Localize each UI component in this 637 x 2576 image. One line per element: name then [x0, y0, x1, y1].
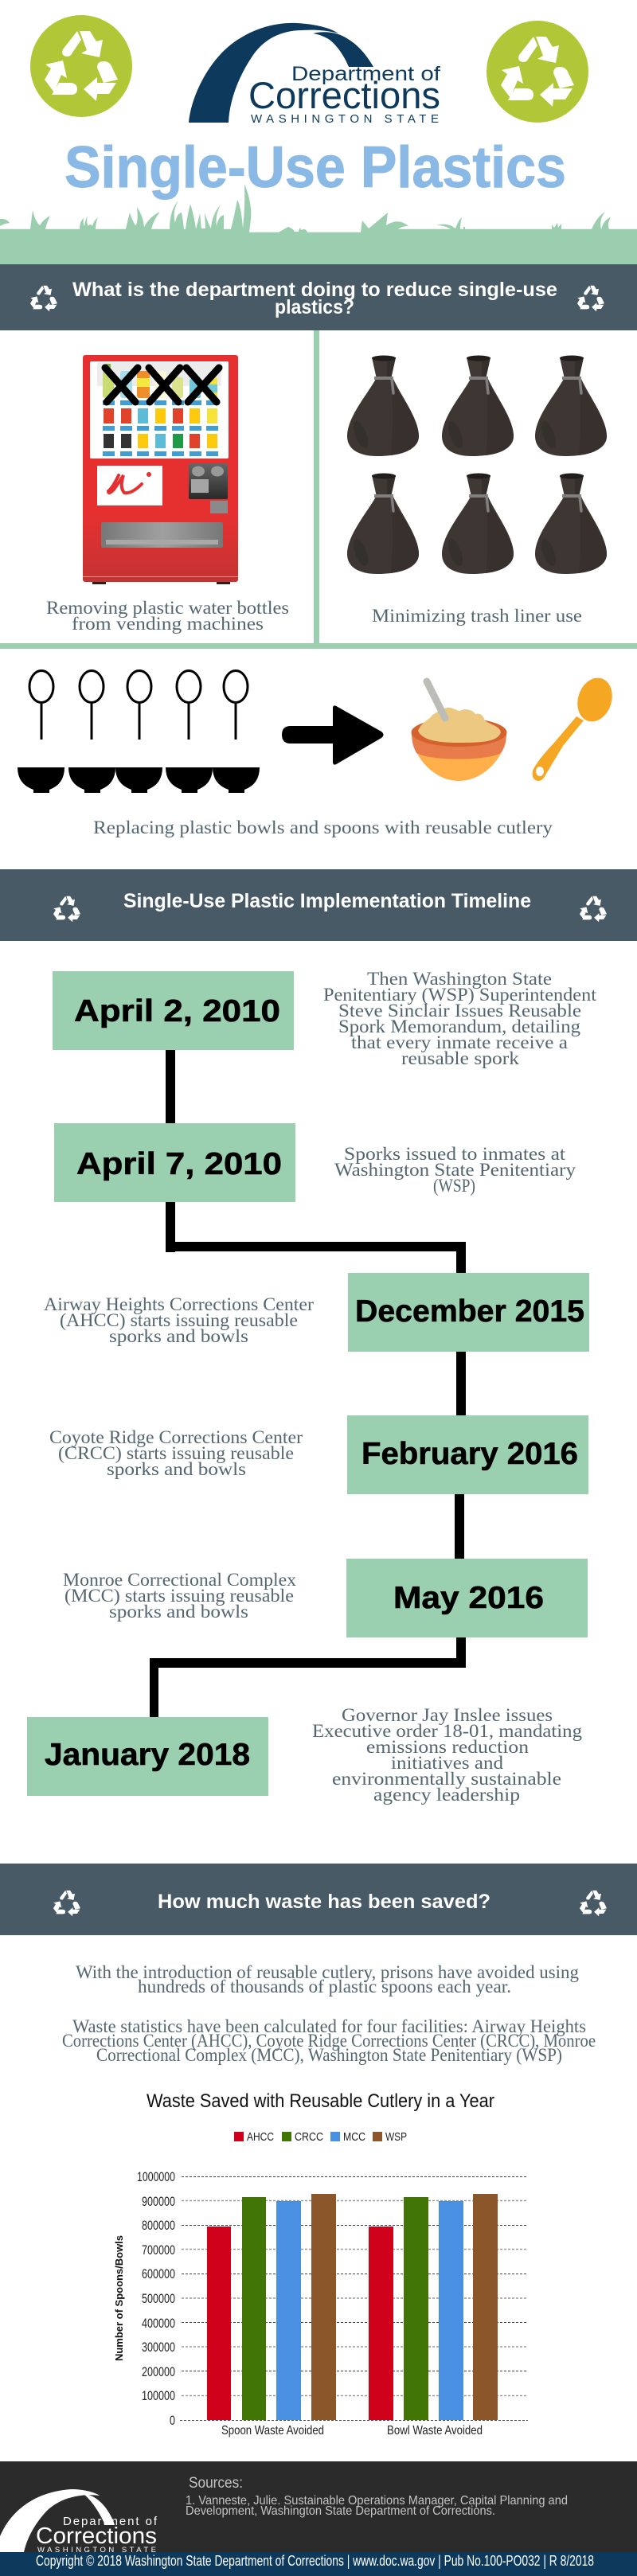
reusable spoon [533, 673, 618, 781]
icon: recycle left [53, 896, 80, 922]
legend [234, 2130, 407, 2144]
legend: MCC [343, 2130, 365, 2144]
legend: CRCC [295, 2130, 323, 2144]
vending machine [83, 355, 238, 584]
crossed-out X marks [105, 368, 219, 402]
caption: trash liner: Minimizing trash liner use [372, 606, 582, 626]
caption: vending machines [46, 598, 289, 634]
footer [0, 2461, 637, 2576]
event text: Executive order: emissions reduction [366, 1737, 530, 1757]
bars: bowl waste [369, 2194, 498, 2420]
logo: Department of Corrections: Corrections [248, 74, 440, 116]
bars: spoon waste [207, 2194, 336, 2420]
logo: Department of Corrections: Department of [291, 63, 440, 85]
caption: vending machines: from vending machines [72, 614, 264, 634]
y axis title: Number of Spoons/Bowls [113, 2235, 125, 2361]
caption: cutlery: Replacing plastic bowls and spoons with reusable cutlery [93, 818, 553, 837]
logo: Department of Corrections [189, 23, 440, 126]
caption: vending machines: Removing plastic water bottles [46, 598, 289, 618]
bar chart [113, 2090, 528, 2437]
icon: recycle right [580, 1891, 607, 1916]
intro paragraph [76, 1962, 579, 1996]
icon: recycle right [580, 896, 607, 922]
title: Single-Use Plastics [64, 135, 566, 200]
event text: sporks issued: Sporks issued to inmates at [344, 1144, 566, 1164]
header text: How much waste has been saved? [158, 1891, 490, 1913]
event text: MCC [63, 1570, 297, 1622]
section header: waste saved [0, 1864, 637, 1935]
icon: recycle right [577, 286, 604, 311]
y axis labels: 800000 [142, 2218, 175, 2233]
footer logo [0, 2489, 158, 2555]
event text: MCC: sporks and bowls [109, 1602, 248, 1622]
brand panel [97, 466, 162, 505]
price tags [103, 400, 218, 456]
event text: memorandum: that every inmate receive a [351, 1032, 568, 1052]
date box: April 2, 2010: April 2, 2010 [74, 994, 280, 1028]
event text: CRCC: (CRCC) starts issuing reusable [58, 1443, 294, 1463]
arrow [282, 705, 384, 765]
event text: AHCC: Airway Heights Corrections Center [44, 1294, 314, 1314]
y axis labels: 200000 [142, 2364, 175, 2379]
event text: sporks issued: Washington State Penitentiary [334, 1160, 576, 1180]
date box: May 2016: May 2016 [393, 1581, 544, 1615]
chart title: Waste Saved with Reusable Cutlery in a Year [147, 2090, 494, 2112]
event text: memorandum: Penitentiary (WSP) Superintendent [323, 985, 597, 1005]
date box: February 2016 [347, 1415, 588, 1494]
section header: What is the department doing [0, 264, 637, 330]
date box: December 2015 [348, 1273, 589, 1352]
date box: April 2, 2010 [53, 971, 294, 1050]
event text: sporks issued [334, 1144, 576, 1196]
event text: memorandum: Then Washington State [367, 969, 552, 989]
sources: Development, Washington State Department of Corrections. [186, 2504, 495, 2518]
y axis labels: 500000 [142, 2291, 175, 2306]
coin panel [189, 463, 228, 513]
date box: April 7, 2010 [54, 1123, 295, 1202]
header text: What is the department doing to reduce single-use [72, 279, 557, 301]
event text: memorandum [323, 969, 597, 1068]
logo: Department of Corrections: WASHINGTON STATE [251, 112, 439, 126]
event text: AHCC [44, 1294, 314, 1346]
section header: timeline [0, 869, 637, 941]
y axis labels: 400000 [142, 2316, 175, 2331]
legend: AHCC [247, 2130, 274, 2144]
plastic spoons [29, 670, 248, 740]
date box: December 2015: December 2015 [355, 1294, 584, 1329]
event text: Executive order: Executive order 18-01, mandating [312, 1721, 583, 1741]
statistics paragraph: Correctional Complex (MCC), Washington State Penitentiary (WSP) [96, 2045, 562, 2065]
statistics paragraph: Waste statistics have been calculated for four facilities: Airway Heights [72, 2016, 586, 2036]
bottles row [103, 364, 217, 398]
sources: Sources: [189, 2475, 243, 2492]
y axis labels: 1000000 [137, 2169, 175, 2184]
y axis labels: 900000 [142, 2194, 175, 2209]
plastic bowls [18, 767, 260, 793]
sources [186, 2475, 568, 2518]
event text: MCC: Monroe Correctional Complex [63, 1570, 297, 1590]
date box: April 7, 2010: April 7, 2010 [76, 1147, 282, 1181]
recycling badge: left [30, 15, 132, 117]
sources: 1. Vanneste, Julie. Sustainable Operations Manager, Capital Planning and [186, 2494, 568, 2508]
event text: memorandum: Spork Memorandum, detailing [338, 1017, 581, 1036]
cans [104, 408, 217, 448]
event text: Executive order [312, 1705, 583, 1805]
legend: WSP [385, 2130, 407, 2144]
date box: January 2018 [27, 1717, 268, 1796]
reusable bowl [411, 681, 506, 781]
intro paragraph: With the introduction of reusable cutlery, prisons have avoided using [76, 1962, 579, 1982]
footer logo: Department of [63, 2515, 158, 2528]
statistics paragraph [62, 2016, 596, 2065]
date box: May 2016 [346, 1559, 588, 1637]
intro paragraph: hundreds of thousands of plastic spoons each year. [138, 1977, 511, 1996]
icon: recycle left [53, 1891, 80, 1916]
grass and ground band [0, 184, 637, 264]
date box: January 2018: January 2018 [45, 1738, 250, 1772]
event text: sporks issued: (WSP) [433, 1176, 475, 1196]
event text: CRCC [49, 1427, 303, 1479]
x axis labels: Bowl Waste Avoided [387, 2424, 483, 2437]
event text: AHCC: (AHCC) starts issuing reusable [60, 1310, 298, 1330]
header text: plastics? [275, 296, 354, 318]
y axis labels: 700000 [142, 2242, 175, 2258]
dispense tray [101, 522, 223, 548]
event text: MCC: (MCC) starts issuing reusable [64, 1586, 294, 1606]
footer logo: Corrections [36, 2523, 157, 2549]
date box: February 2016: February 2016 [361, 1437, 578, 1471]
panel dividers [0, 330, 637, 649]
copyright bar [0, 2552, 637, 2576]
event text: memorandum: reusable spork [401, 1048, 520, 1068]
y axis labels: 100000 [142, 2388, 175, 2403]
icon: recycle left [30, 286, 57, 311]
event text: Executive order: initiatives and [391, 1753, 504, 1773]
x axis labels [221, 2424, 483, 2437]
header text [72, 279, 557, 318]
header text: Single-Use Plastic Implementation Timeline [123, 890, 531, 912]
event text: AHCC: sporks and bowls [109, 1326, 248, 1346]
event text: Executive order: environmentally sustainable [332, 1769, 561, 1789]
event text: memorandum: Steve Sinclair Issues Reusable [338, 1001, 581, 1021]
x axis labels: Spoon Waste Avoided [221, 2424, 324, 2437]
y axis labels [137, 2169, 175, 2428]
event text: CRCC: Coyote Ridge Corrections Center [49, 1427, 303, 1447]
trash bags [347, 355, 607, 574]
footer logo: WASHINGTON STATE [37, 2546, 156, 2555]
event text: CRCC: sporks and bowls [107, 1459, 246, 1479]
timeline connectors [150, 1050, 466, 1717]
gridlines [180, 2176, 528, 2420]
event text: Executive order: Governor Jay Inslee issues [342, 1705, 553, 1725]
y axis labels: 600000 [142, 2266, 175, 2281]
y axis labels: 0 [170, 2413, 175, 2428]
event text: Executive order: agency leadership [373, 1785, 520, 1805]
recycling badge: right [487, 21, 588, 123]
y axis labels: 300000 [142, 2340, 175, 2355]
